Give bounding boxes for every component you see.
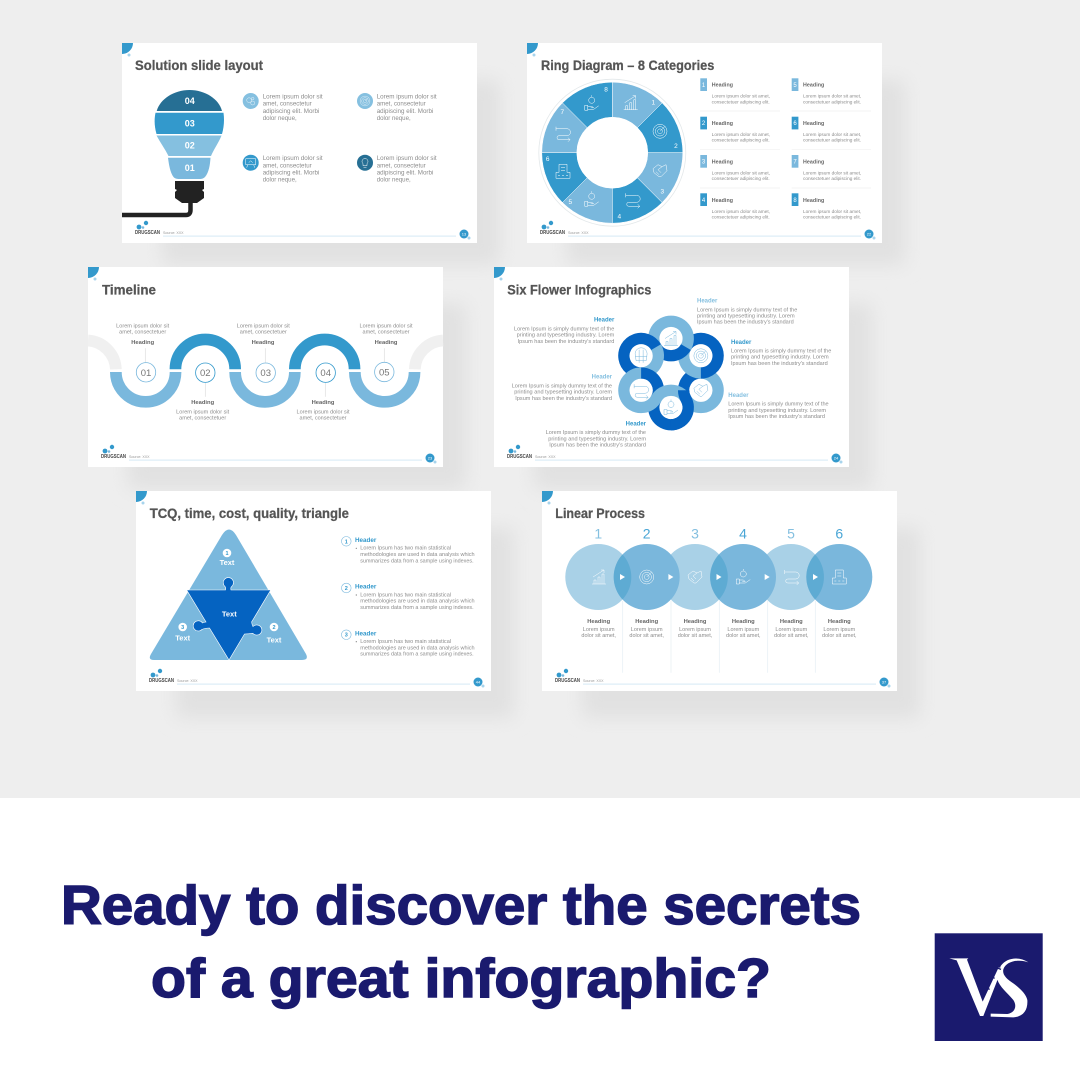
text block: right lower header: Ipsum has been the industry's standard [728,414,825,420]
milestone: 04 [316,363,335,382]
text block: left lower header [512,375,613,402]
heading: Six Flower Infographics [507,282,651,297]
dividers [623,601,815,673]
footer: logo, source and page number: Source: XXX [535,455,556,459]
milestone labels: Lorem ipsum dolor sit [116,324,170,330]
milestone: 03 [256,363,275,382]
chart: eight segment ring: 1 [651,100,655,107]
text block: left upper header: printing and typesetting industry. Lorem [517,333,614,339]
heading: Solution slide layout [135,58,263,73]
milestone: 05: 05 [379,368,390,378]
legend: categories one to four: 1 [702,83,706,89]
text block: point two: Lorem ipsum dolor sit [377,94,437,100]
list item: header one: methodologies are used in data analysis which [360,552,475,558]
text block: left upper header: Ipsum has been the industry's standard [518,339,614,345]
icon: idea bulb [357,155,373,171]
text block: point three: dolor neque, [263,176,297,183]
step numbers: 5 [787,526,795,542]
list item: header two: methodologies are used in data analysis which [360,599,475,605]
chart: puzzle triangle: 1 [225,551,229,557]
text block: right lower header: Lorem Ipsum is simply dummy text of the [728,402,829,408]
legend: categories one to four: consectetuer adipiscing elit. [712,99,770,104]
legend: categories five to eight: Lorem ipsum dolor sit amet, [803,209,861,214]
legend: categories five to eight: consectetuer adipiscing elit. [803,176,861,181]
legend: categories one to four: 4 [702,198,706,204]
footer: logo, source and page number: 22 [867,232,872,236]
chart: puzzle triangle: Text [267,635,282,644]
list item: header two: Header [355,584,377,591]
footer: logo, source and page number: 13 [462,232,467,236]
legend: categories one to four: Heading [712,159,733,165]
list item: header three: summarizes data from a sample using indexes. [360,652,474,658]
heading: Linear Process [555,506,645,521]
chart: light bulb: 01 [185,163,195,173]
text block: left lower header: Lorem Ipsum is simply dummy text of the [512,383,612,389]
text block: left lower header: Header [592,375,613,381]
text block: point two [377,94,437,122]
list item: header one: summarizes data from a sample using indexes. [360,558,474,564]
list item: header two: Lorem Ipsum has two main statistical [360,592,451,598]
text block: bottom header [546,421,647,448]
chart: eight segment ring: 5 [568,199,572,206]
legend: categories one to four: Lorem ipsum dolor sit amet, [712,132,770,137]
milestone: 01: 01 [141,368,151,379]
panel: solution slide layout [122,43,477,243]
legend: categories one to four [700,78,770,219]
chart: puzzle triangle: Text [222,610,237,619]
chart: puzzle triangle: Text [175,634,191,643]
list item: header one: Header [355,537,377,544]
step labels: Heading [828,619,851,625]
chart: puzzle triangle: 2 [272,625,276,631]
list item: header one: Lorem Ipsum has two main statistical [360,546,451,552]
text block: left lower header: Ipsum has been the industry's standard [515,396,612,402]
legend: categories one to four: consectetuer adipiscing elit. [712,214,770,219]
footer: logo, source and page number: 24 [834,456,839,460]
legend: categories five to eight: Heading [803,83,824,89]
connector lines [145,348,384,397]
chart: wave track [88,339,443,402]
milestone: 02 [196,363,215,382]
chart: eight segment ring: 6 [546,156,550,163]
legend: categories five to eight: Lorem ipsum dolor sit amet, [803,132,861,137]
text block: point two: amet, consectetur [377,101,426,108]
text block: right lower header: Header [728,393,749,399]
chart: eight segment ring: 4 [617,213,621,220]
list item: header one [342,536,475,564]
step numbers: 3 [691,526,699,542]
step labels: dolor sit amet, [581,633,616,639]
step labels: Lorem ipsum [823,627,856,633]
legend: categories five to eight: 6 [793,121,797,127]
milestone labels: Lorem ipsum dolor sit [176,410,230,416]
text block: point four: Lorem ipsum dolor sit [377,155,437,162]
chart: light bulb [122,90,224,215]
legend: categories one to four: 3 [702,160,706,166]
milestone labels: Heading [252,340,275,346]
list item: header two: summarizes data from a sample using indexes. [360,605,474,611]
step numbers: 6 [835,526,843,542]
icon: target [357,93,373,109]
icon: presentation board [243,155,259,171]
legend: categories five to eight: consectetuer adipiscing elit. [803,99,861,104]
chart: eight segment ring [539,79,686,226]
legend: categories five to eight: Lorem ipsum dolor sit amet, [803,94,861,99]
headline: of a great infographic? [151,947,771,1009]
footer: logo, source and page number [135,221,470,240]
step labels: Heading [587,619,611,625]
list item: header three: 3 [345,633,348,639]
step labels: Lorem ipsum [679,627,711,633]
step labels: Heading [732,619,755,625]
legend: categories five to eight: 5 [793,83,797,89]
legend: categories one to four: Heading [712,83,733,89]
footer: logo, source and page number: 23 [428,456,433,460]
text block: point one: dolor neque, [263,115,297,122]
chart: interlocking six ring flower [624,321,718,425]
list item: header three: methodologies are used in data analysis which [360,645,475,651]
footer: logo, source and page number [507,445,842,464]
headline [61,874,861,1009]
text block: point two: dolor neque, [377,115,411,122]
footer: logo, source and page number: Source: XXX [177,679,198,683]
legend: categories one to four: Lorem ipsum dolor sit amet, [712,94,770,99]
text block: point one: Lorem ipsum dolor sit [263,94,323,100]
text block: point three [263,155,323,183]
panel: six flower infographics [494,267,849,467]
text block: top right header: printing and typesetting industry. Lorem [697,314,795,320]
step numbers [594,526,843,542]
legend: categories one to four: Lorem ipsum dolor sit amet, [712,209,770,214]
panel: TCQ triangle [136,491,491,691]
chart: puzzle triangle: Text [220,558,235,567]
text block: point two: adipiscing elit. Morbi [377,108,433,115]
footer: logo, source and page number: Source: XXX [568,231,589,235]
chart: light bulb: 02 [185,140,195,150]
list item: header one: 1 [345,539,348,545]
text block: top right header: Lorem Ipsum is simply dummy text of the [697,307,797,313]
legend: categories five to eight: consectetuer adipiscing elit. [803,214,861,219]
milestone labels: amet, consectetuer [362,330,410,336]
icon: gears [243,93,259,109]
step labels: Lorem ipsum [631,627,663,633]
text block: right upper header: Lorem Ipsum is simply dummy text of the [731,349,831,355]
legend: categories five to eight: 7 [793,160,797,166]
step labels: dolor sit amet, [726,633,761,639]
step labels: dolor sit amet, [774,633,809,639]
footer: logo, source and page number [540,221,876,240]
text block: point three: adipiscing elit. Morbi [263,169,319,176]
milestone labels: Lorem ipsum dolor sit [237,324,290,330]
panel: ring diagram [527,43,882,243]
legend: categories one to four: Lorem ipsum dolor sit amet, [712,170,770,175]
chart: light bulb: 04 [185,96,195,106]
list item: header two [342,583,475,611]
text block: right upper header: Header [731,340,752,346]
milestone labels: Lorem ipsum dolor sit [296,410,350,416]
text block: point three: amet, consectetur [263,162,312,169]
chart: overlapping process circles [565,544,872,610]
text block: bottom header: Lorem Ipsum is simply dummy text of the [546,430,646,436]
step numbers: 4 [739,526,747,542]
footer: logo, source and page number [149,669,484,688]
footer: logo, source and page number: 44 [476,680,481,684]
heading: Timeline [102,282,156,297]
text block: top right header: Header [697,299,718,305]
milestone: 02: 02 [200,368,211,379]
icon: VS logo [935,933,1043,1041]
milestone labels [116,324,413,422]
step labels: dolor sit amet, [629,633,664,639]
milestone: 05 [375,362,394,382]
step labels: Heading [780,619,803,625]
text block: point three: Lorem ipsum dolor sit [263,155,323,162]
milestone labels: Heading [312,400,335,406]
step labels: dolor sit amet, [678,633,713,639]
headline: Ready to discover the secrets [61,874,861,936]
legend: categories one to four: 2 [702,121,706,127]
step numbers: 1 [594,526,602,542]
text block: point four [377,155,437,183]
milestone labels: amet, consectetuer [119,330,166,336]
legend: categories five to eight: Heading [803,159,824,165]
footer: logo, source and page number: Source: XXX [583,679,604,683]
milestone labels: amet, consectetuer [179,416,226,422]
legend: categories five to eight: Lorem ipsum dolor sit amet, [803,170,861,175]
legend: categories five to eight [700,78,871,219]
footer: logo, source and page number: DRUGSCAN [149,678,174,684]
legend: categories five to eight: Heading [803,198,824,204]
step labels [581,619,857,639]
legend: categories one to four: Heading [712,198,733,204]
text block: right upper header [731,340,831,367]
step labels: Heading [684,619,707,625]
text block: left upper header: Header [594,318,615,324]
text block: top right header: Ipsum has been the industry's standard [697,320,794,326]
footer: logo, source and page number: DRUGSCAN [507,454,532,460]
chart: eight segment ring: 8 [604,87,608,94]
text block: point one [263,94,323,122]
legend: categories five to eight: 8 [793,198,797,204]
text block: right lower header [728,393,829,420]
panel: linear process [542,491,897,691]
text block: point one: amet, consectetur [263,101,312,108]
legend: categories one to four: consectetuer adipiscing elit. [712,176,770,181]
milestone labels: Heading [375,340,398,346]
milestone: 04: 04 [320,368,331,379]
milestone: 03: 03 [260,368,271,379]
milestone: 01 [136,363,156,382]
footer: logo, source and page number: 37 [882,680,887,684]
text block: bottom header: Header [626,421,647,427]
bottom band [0,798,1080,1080]
heading: TCQ, time, cost, quality, triangle [150,506,349,521]
text block: right upper header: printing and typesetting industry. Lorem [731,355,829,361]
legend: categories five to eight: consectetuer adipiscing elit. [803,138,861,143]
step labels: dolor sit amet, [822,633,857,639]
step labels: Lorem ipsum [583,627,615,633]
footer: logo, source and page number [555,669,890,688]
chart: puzzle triangle [150,530,307,660]
text block: point four: dolor neque, [377,176,411,183]
footer: logo, source and page number: DRUGSCAN [555,678,580,684]
step labels: Heading [635,619,659,625]
text block: point one: adipiscing elit. Morbi [263,108,319,115]
list item: header three: Header [355,630,377,637]
text block: point four: amet, consectetur [377,162,426,169]
legend: categories one to four: Heading [712,121,733,127]
milestone labels: Lorem ipsum dolor sit [360,324,413,330]
milestone labels: Heading [131,340,155,346]
chart: eight segment ring: 7 [560,109,564,116]
panel: timeline [88,267,443,467]
text block: right lower header: printing and typesetting industry. Lorem [728,408,826,414]
text block: point four: adipiscing elit. Morbi [377,169,433,176]
chart: puzzle triangle: 3 [181,625,184,631]
footer: logo, source and page number [101,445,436,464]
panel shadows [128,80,920,718]
chart: eight segment ring: 2 [674,143,678,150]
milestone labels: amet, consectetuer [300,416,347,422]
chart: eight segment ring: 3 [660,189,664,196]
step labels: Lorem ipsum [775,627,808,633]
footer: logo, source and page number: Source: XXX [129,455,150,459]
text block: bottom header: printing and typesetting industry. Lorem [548,436,646,442]
text block: left lower header: printing and typesetting industry. Lorem [514,390,612,396]
legend: categories five to eight: Heading [803,121,824,127]
heading: Ring Diagram – 8 Categories [541,58,714,73]
list item: header two: 2 [345,586,348,592]
text block: left upper header: Lorem Ipsum is simply dummy text of the [514,326,614,332]
text block: left upper header [514,318,615,345]
legend: categories one to four: consectetuer adipiscing elit. [712,138,770,143]
text block: top right header [697,299,797,326]
footer: logo, source and page number: DRUGSCAN [135,230,160,236]
page background [0,0,1080,798]
text block: bottom header: Ipsum has been the industry's standard [549,442,646,448]
list item: header three: Lorem Ipsum has two main statistical [360,639,451,645]
footer: logo, source and page number: DRUGSCAN [101,454,126,460]
chart: light bulb: 03 [185,118,195,128]
step numbers: 2 [643,526,651,542]
list item: header three [342,630,475,658]
text block: right upper header: Ipsum has been the industry's standard [731,361,828,367]
footer: logo, source and page number: Source: XXX [163,231,184,235]
step labels: Lorem ipsum [727,627,760,633]
footer: logo, source and page number: DRUGSCAN [540,230,565,236]
milestone labels: Heading [191,400,215,406]
milestone labels: amet, consectetuer [240,330,287,336]
